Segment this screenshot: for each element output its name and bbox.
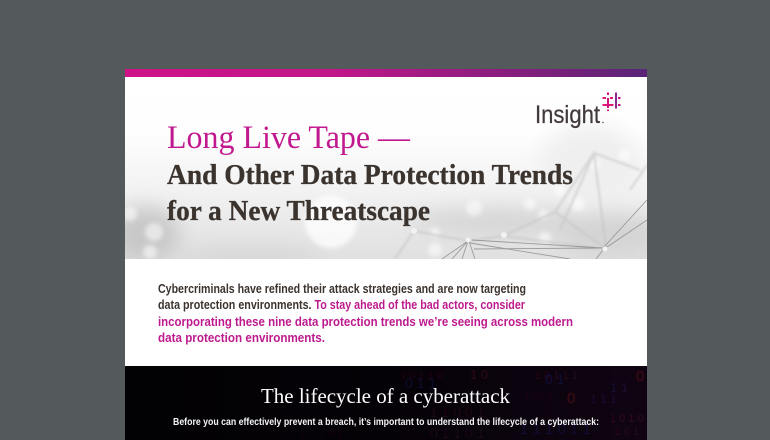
- binary code pattern: 1 1 1: [590, 392, 617, 406]
- binary code pattern: 1 0 1 0: [610, 413, 644, 425]
- title block: [167, 120, 573, 227]
- title line: And Other Data Protection Trends: And Other Data Protection Trends: [167, 159, 573, 191]
- header image: grey bokeh and network: [125, 126, 647, 259]
- dark lifecycle panel: [125, 366, 647, 440]
- binary code pattern: 1 1 0 0 1: [430, 404, 485, 420]
- binary code pattern: 0: [567, 390, 575, 407]
- soft wide network strands: [395, 153, 647, 259]
- binary code pattern: 1 0 1: [615, 426, 639, 438]
- logo mark: [602, 92, 620, 111]
- binary code pattern: 1 1: [610, 380, 628, 395]
- logo dot: [602, 122, 604, 123]
- logo wordmark: Insight: [535, 101, 600, 129]
- binary code pattern: 1 0 1 1 1: [535, 370, 578, 382]
- binary code pattern: 0 1: [545, 371, 565, 387]
- binary code pattern: 1 0: [470, 367, 488, 382]
- binary code pattern: 1 0 1 0 1: [300, 427, 343, 439]
- white document panel: [125, 77, 647, 440]
- binary code pattern: 0 1 1: [405, 375, 436, 391]
- binary code pattern: 0: [636, 368, 644, 385]
- lifecycle subheading: Before you can effectively prevent a breach, it’s important to understand the lifecycle of a cyberattack:: [173, 417, 599, 428]
- lifecycle heading: The lifecycle of a cyberattack: [261, 384, 510, 408]
- title line: Long Live Tape: Long Live Tape —: [167, 120, 411, 156]
- binary code pattern: [300, 367, 644, 440]
- intro line 3: incorporating these nine data protection trends we’re seeing across modern: [158, 314, 573, 329]
- dark panel background: [125, 366, 647, 440]
- logo: Insight: [535, 92, 620, 129]
- sharp network strands: [442, 200, 647, 259]
- gradient top bar: [125, 69, 647, 77]
- title line: for a New Threatscape: for a New Threatscape: [167, 195, 430, 227]
- intro line 2: data protection environments. To stay ahead of the bad actors, consider: [158, 297, 525, 312]
- binary code pattern: 1 1 1 0 1 1: [520, 421, 591, 438]
- binary code pattern: 1 0 0 1: [525, 391, 553, 401]
- intro line 4: data protection environments.: [158, 330, 325, 345]
- binary code pattern: 1 0 1 1 0: [400, 370, 443, 382]
- intro text block: [158, 281, 573, 345]
- intro line 1: Cybercriminals have refined their attack strategies and are now targeting: [158, 281, 526, 296]
